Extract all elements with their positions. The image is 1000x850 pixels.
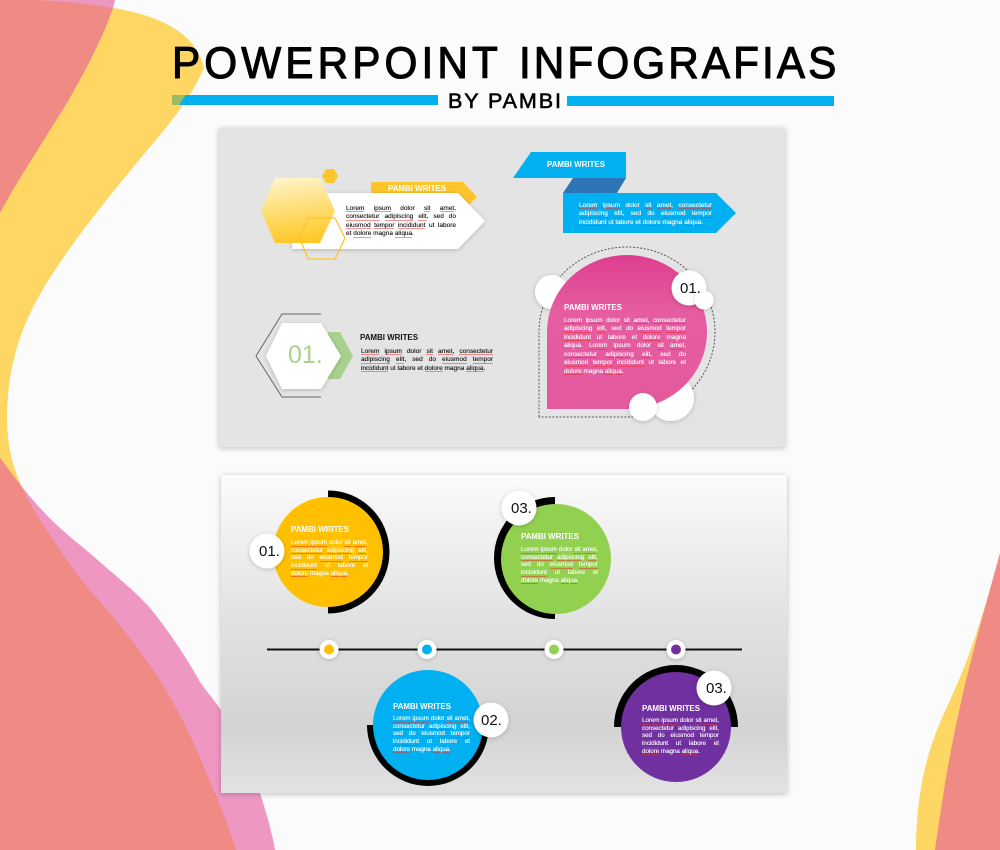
- timeline: [267, 640, 742, 659]
- pink teardrop callout: PAMBI WRITES: [564, 302, 622, 312]
- pink teardrop callout: incididunt ut labore et dolore magna: [564, 334, 686, 340]
- title: [172, 39, 836, 88]
- yellow circle step 01: Lorem ipsum dolor sit amet,: [291, 539, 368, 546]
- numbered hexagon callout: 01.: [288, 341, 323, 369]
- yellow circle step 01: PAMBI WRITES: [291, 524, 349, 534]
- yellow circle step 01: 01.: [259, 543, 280, 560]
- blue ribbon callout: PAMBI WRITES: [547, 159, 605, 169]
- green circle step 03: 03.: [511, 500, 532, 517]
- blue circle step 02: incididunt ut labore et: [393, 738, 470, 745]
- title: POWERPOINT: [172, 39, 498, 88]
- panel: top slide: [219, 128, 785, 447]
- purple circle step 03: sed do eiusmod tempor: [642, 732, 719, 739]
- yellow hexagon callout: PAMBI WRITES: [388, 183, 446, 193]
- purple circle step 03: dolore magna aliqua.: [642, 748, 700, 755]
- panel: bottom slide: [221, 475, 787, 793]
- blue circle step 02: Lorem ipsum dolor sit amet,: [393, 715, 470, 722]
- yellow hexagon callout: consectetur adipiscing elit, sed do: [346, 213, 456, 220]
- background wave: right yellow: [916, 562, 1000, 850]
- blue circle step 02: dolore magna aliqua.: [393, 746, 451, 753]
- yellow circle step 01: sed do eiusmod tempor: [291, 554, 368, 561]
- yellow circle step 01: incididunt ut labore et: [291, 562, 368, 569]
- blue circle step 02: 02.: [481, 712, 502, 729]
- background wave: top-left pink sliver: [40, 0, 115, 9]
- yellow hexagon callout: [261, 169, 485, 259]
- pink teardrop callout: eiusmod tempor incididunt ut labore et: [564, 359, 686, 366]
- background wave: lower-left coral: [0, 458, 236, 850]
- pink teardrop callout: aliqua. Lorem ipsum dolor sit amet,: [564, 342, 686, 349]
- purple circle step 03: [614, 665, 738, 782]
- pink teardrop callout: [535, 247, 715, 421]
- purple circle step 03: Lorem ipsum dolor sit amet,: [642, 717, 719, 724]
- yellow circle step 01: [250, 490, 389, 614]
- green circle step 03: PAMBI WRITES: [521, 531, 579, 541]
- purple circle step 03: incididunt ut labore et: [642, 740, 719, 747]
- yellow hexagon callout: eiusmod tempor incididunt ut labore: [346, 222, 456, 228]
- pink teardrop callout: Lorem ipsum dolor sit amet, consectetur: [564, 316, 686, 324]
- green circle step 03: consectetur adipiscing elit,: [521, 554, 598, 561]
- numbered hexagon callout: incididunt ut labore et dolore magna aliqua.: [361, 364, 485, 372]
- background wave: left yellow: [0, 0, 204, 487]
- blue circle step 02: [367, 670, 508, 786]
- green circle step 03: Lorem ipsum dolor sit amet,: [521, 546, 598, 553]
- green circle step 03: incididunt ut labore et: [521, 569, 598, 576]
- blue circle step 02: sed do eiusmod tempor: [393, 730, 470, 737]
- green circle step 03: dolore magna aliqua.: [521, 577, 579, 584]
- numbered hexagon callout: PAMBI WRITES: [360, 332, 418, 342]
- pink teardrop callout: consectetur adipiscing elit, sed do: [564, 350, 686, 358]
- pink teardrop callout: adipiscing elit, sed do eiusmod tempor: [564, 325, 686, 332]
- pink teardrop callout: dolore magna aliqua.: [564, 368, 624, 374]
- yellow circle step 01: dolore magna aliqua.: [291, 570, 349, 577]
- numbered hexagon callout: Lorem ipsum dolor sit amet, consectetur: [361, 348, 493, 354]
- green circle step 03: sed do eiusmod tempor: [521, 561, 598, 568]
- purple circle step 03: consectetur adipiscing elit,: [642, 725, 719, 732]
- pink teardrop callout: 01.: [680, 280, 701, 297]
- yellow circle step 01: consectetur adipiscing elit,: [291, 547, 368, 554]
- yellow hexagon callout: et dolore magna aliqua.: [346, 230, 414, 237]
- blue ribbon callout: [513, 152, 736, 233]
- blue ribbon callout: adipiscing elit, sed do eiusmod tempor: [579, 210, 712, 217]
- background wave: top-left coral: [0, 0, 113, 213]
- subtitle with rules: BY PAMBI: [448, 89, 561, 113]
- background wave: lower-left pink: [0, 458, 275, 850]
- blue circle step 02: consectetur adipiscing elit,: [393, 723, 470, 730]
- numbered hexagon callout: adipiscing elit, sed do eiusmod tempor: [361, 356, 493, 363]
- blue ribbon callout: Lorem ipsum dolor sit amet, consectetur: [579, 202, 712, 208]
- title: INFOGRAFIAS: [519, 39, 836, 88]
- blue ribbon callout: incididunt ut labore et dolore magna aliqua.: [579, 218, 703, 226]
- numbered hexagon callout: [256, 314, 493, 397]
- subtitle with rules: [172, 89, 834, 113]
- purple circle step 03: PAMBI WRITES: [642, 703, 700, 713]
- background wave: right coral: [935, 553, 1000, 850]
- green circle step 03: [494, 490, 611, 619]
- blue circle step 02: PAMBI WRITES: [393, 701, 451, 711]
- yellow hexagon callout: Lorem ipsum dolor sit amet,: [346, 204, 456, 212]
- purple circle step 03: 03.: [706, 680, 727, 697]
